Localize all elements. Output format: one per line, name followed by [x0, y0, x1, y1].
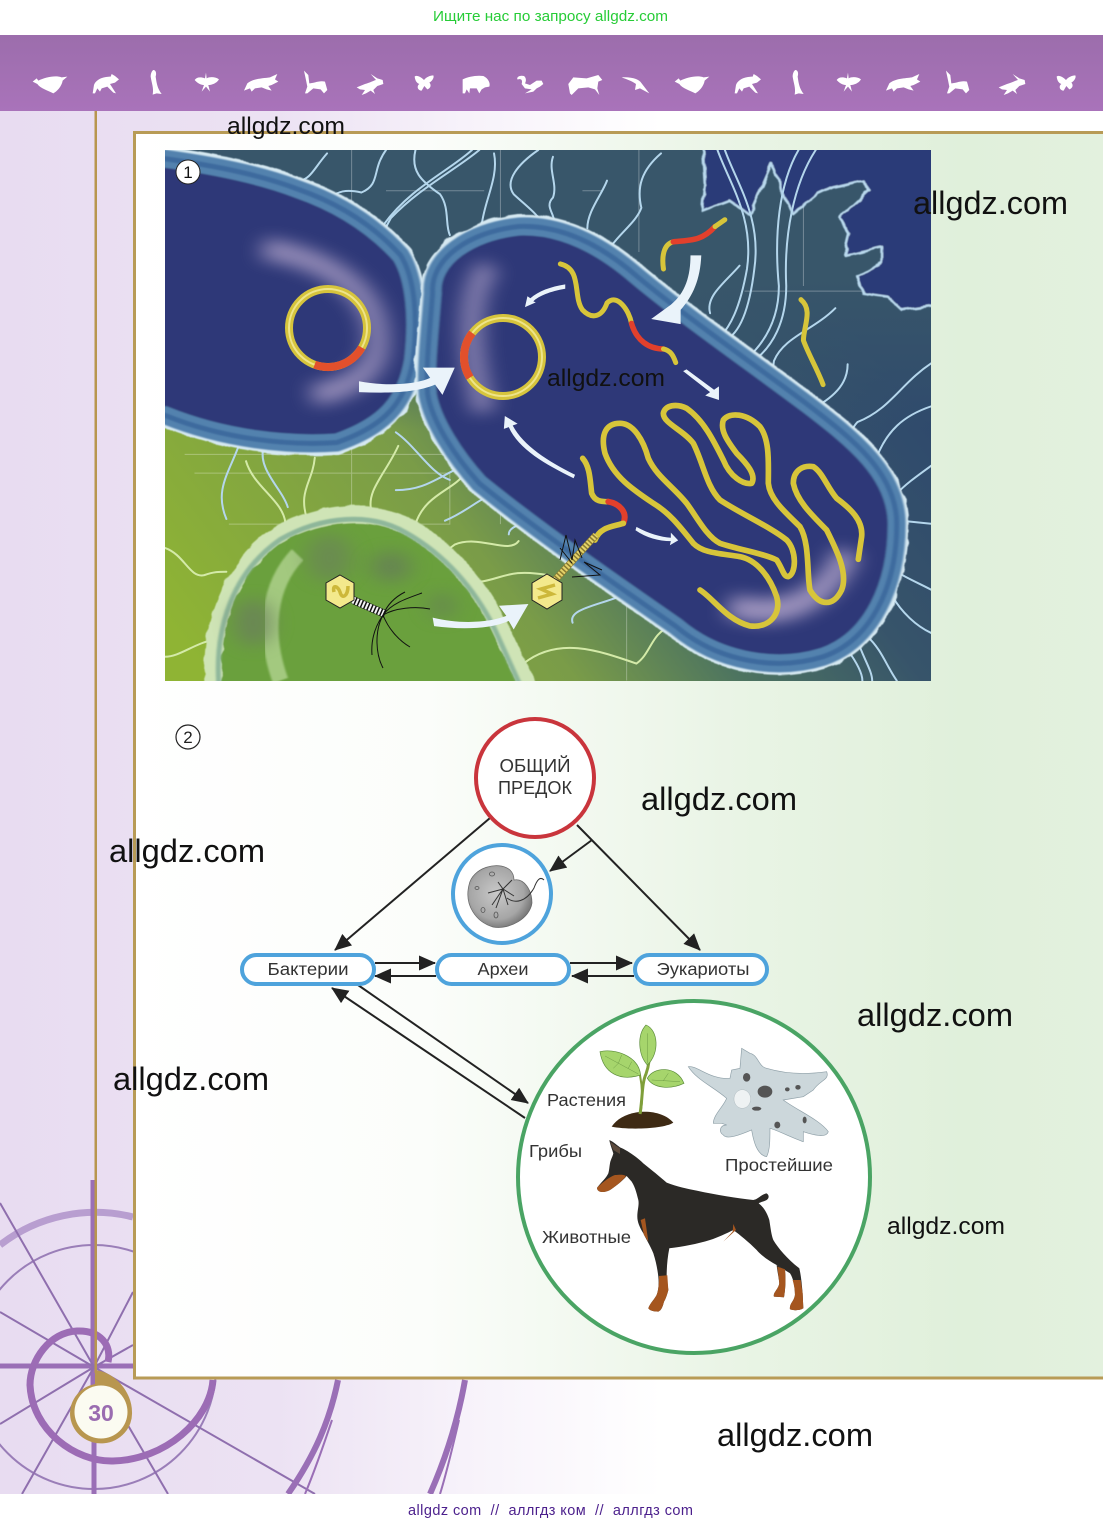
- plasmid ring right: [460, 314, 546, 400]
- free DNA fragment top: [663, 220, 725, 269]
- gold margin line: [94, 111, 97, 1373]
- common ancestor node: ПРЕДОК: [498, 778, 573, 798]
- plasmid ring left: [285, 285, 371, 372]
- node: archaea: [437, 955, 569, 984]
- watermarks: allgdz.com: [857, 997, 1013, 1033]
- page number badge: [70, 1370, 132, 1443]
- phage attached to big bacterium: [532, 535, 602, 609]
- navy region with squiggly outline: [703, 143, 951, 310]
- eukaryote kingdoms circle: [518, 1001, 870, 1353]
- icon: plant seedling: [600, 1025, 684, 1129]
- footer caption: allgdz com // аллгдз ком // аллгдз com: [408, 1503, 693, 1519]
- left bacterium: [150, 157, 415, 443]
- flagella hairs blue: [222, 150, 935, 681]
- node: archaea: Археи: [478, 959, 528, 979]
- illustration 1: gene transfer between bacteria: [165, 150, 931, 681]
- kingdom labels: Животные: [542, 1227, 631, 1247]
- watermarks: allgdz.com: [113, 1061, 269, 1097]
- green cell: [202, 504, 536, 681]
- animal silhouette band: [0, 35, 1103, 111]
- watermarks: allgdz.com: [913, 185, 1068, 221]
- node: eukaryotes: [635, 955, 767, 984]
- page number badge: 30: [88, 1400, 114, 1426]
- white transfer arrows: [359, 255, 719, 630]
- free DNA fragment right: [801, 300, 823, 385]
- watermarks: allgdz.com: [227, 113, 345, 140]
- node: bacteria: Бактерии: [268, 959, 348, 979]
- kingdom labels: Грибы: [529, 1141, 582, 1161]
- watermarks: [109, 113, 1068, 1453]
- number badge 1: 1: [183, 163, 193, 182]
- kingdom labels: Простейшие: [725, 1155, 833, 1175]
- common ancestor node: [476, 719, 594, 837]
- big bacterium: [427, 226, 897, 663]
- icon: amoeba: [688, 1048, 828, 1157]
- chromosome DNA coils: [583, 406, 862, 626]
- diagram arrows: [332, 818, 700, 1118]
- number badge 2: 2: [183, 728, 193, 747]
- wavy incoming DNA strand: [560, 264, 676, 363]
- node: bacteria: [242, 955, 374, 984]
- kingdom labels: Растения: [547, 1090, 626, 1110]
- kingdom labels: [529, 1090, 833, 1247]
- watermarks: allgdz.com: [547, 365, 665, 392]
- common ancestor node: ОБЩИЙ: [500, 755, 570, 776]
- watermarks: allgdz.com: [887, 1213, 1005, 1240]
- archaea cell node: [453, 845, 551, 943]
- watermarks: allgdz.com: [109, 833, 265, 869]
- number badge 1: [176, 160, 200, 184]
- watermarks: allgdz.com: [641, 781, 797, 817]
- top caption: Ищите нас по запросу allgdz.com: [433, 9, 668, 25]
- decorative spiral: [0, 1180, 465, 1494]
- watermarks: allgdz.com: [717, 1417, 873, 1453]
- phage inside green cell: [326, 575, 430, 668]
- node: eukaryotes: Эукариоты: [656, 959, 750, 979]
- main panel: [134, 132, 1103, 1378]
- number badge 2: [176, 725, 200, 749]
- icon: dobermann dog: [597, 1140, 803, 1312]
